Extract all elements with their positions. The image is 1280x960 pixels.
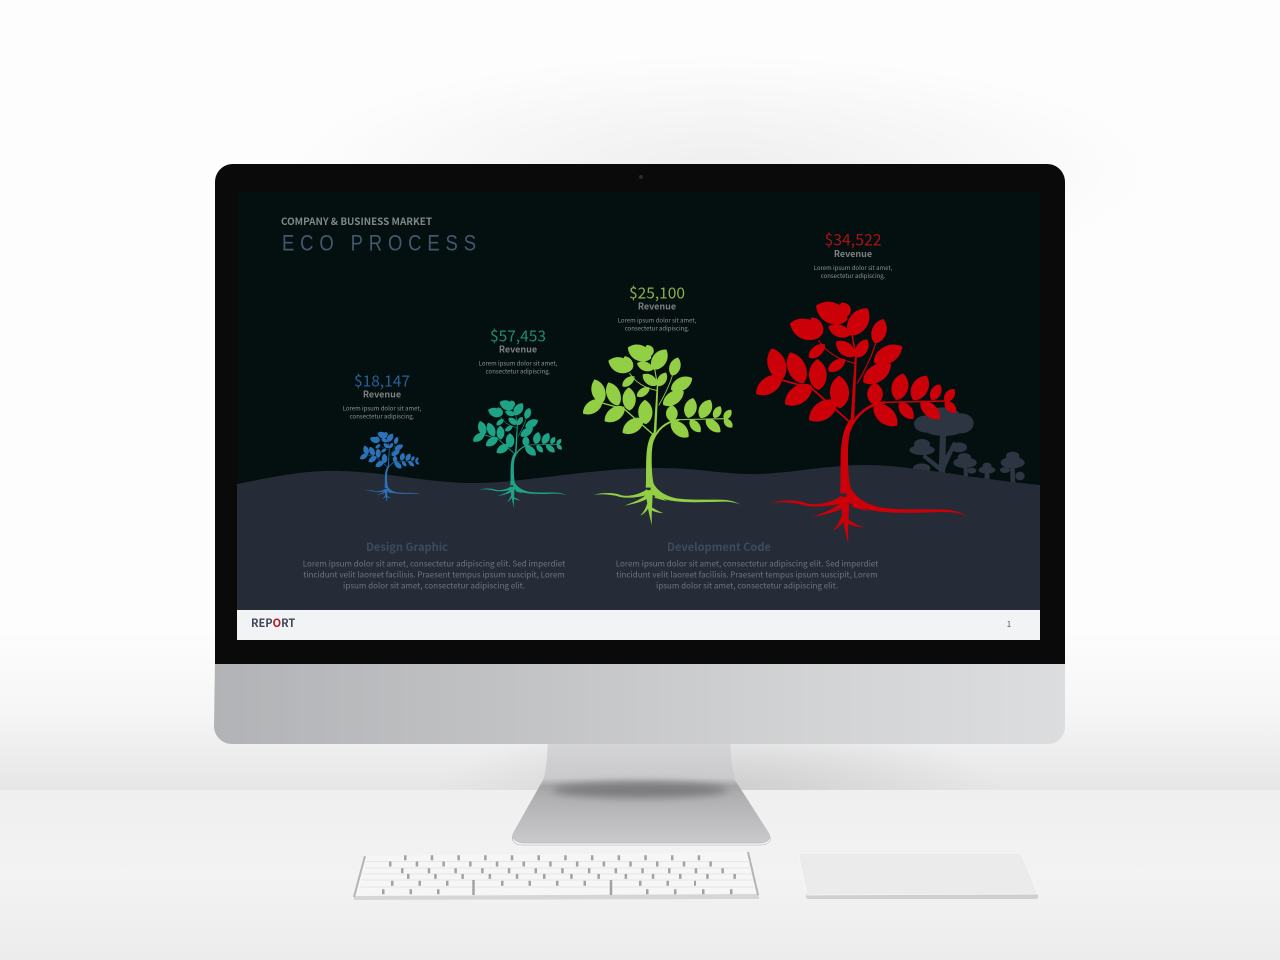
tree: blue — [359, 430, 422, 503]
stat: green revenue — [618, 282, 697, 332]
keyboard — [354, 852, 759, 900]
stat: teal revenue: consectetur adipiscing. — [486, 366, 551, 376]
text block: development code: tincidunt velit laoreet facilisis. Praesent tempus ipsum suscipit, Lorem — [616, 570, 878, 580]
footer bar — [237, 610, 1040, 640]
tree: teal — [471, 398, 567, 508]
stat: teal revenue: Lorem ipsum dolor sit amet, — [479, 358, 558, 368]
subtitle: COMPANY & BUSINESS MARKET — [281, 214, 432, 228]
text block: development code — [616, 539, 878, 592]
monitor bezel — [215, 164, 1065, 664]
background forest silhouette — [909, 407, 1025, 485]
camera — [639, 175, 643, 179]
text block: development code: ipsum dolor sit amet, consectetur adipiscing elit. — [656, 580, 838, 592]
trackpad — [798, 853, 1038, 899]
stat: green revenue: $25,100 — [629, 282, 685, 304]
stat: red revenue: consectetur adipiscing. — [821, 271, 886, 280]
screen: slide background — [237, 192, 1040, 640]
stat: blue revenue — [343, 370, 422, 420]
footer brand: REPORT — [251, 615, 295, 631]
monitor chin — [214, 660, 1065, 744]
stat: red revenue — [814, 228, 893, 280]
title: ECO PROCESS — [282, 232, 476, 256]
stat: red revenue: Lorem ipsum dolor sit amet, — [814, 263, 893, 272]
text block: design graphic — [303, 539, 565, 592]
text block: design graphic: tincidunt velit laoreet facilisis. Praesent tempus ipsum suscipit, Lorem — [303, 570, 565, 580]
ground hill — [237, 465, 1040, 610]
stat: green revenue: consectetur adipiscing. — [625, 324, 690, 332]
stat: red revenue: Revenue — [834, 247, 872, 260]
stat: teal revenue — [479, 324, 558, 376]
text block: development code: Lorem ipsum dolor sit amet, consectetur adipiscing elit. Sed imperdiet — [616, 558, 878, 570]
stat: blue revenue: Lorem ipsum dolor sit amet, — [343, 404, 422, 412]
stat: teal revenue: Revenue — [499, 342, 537, 356]
text block: design graphic: ipsum dolor sit amet, consectetur adipiscing elit. — [343, 580, 525, 592]
tree: red — [751, 296, 967, 544]
stat: green revenue: Lorem ipsum dolor sit amet, — [618, 316, 697, 324]
title block — [281, 214, 476, 256]
text block: design graphic: Design Graphic — [366, 539, 448, 555]
page number: 1 — [1007, 619, 1011, 630]
tree: green — [580, 340, 741, 526]
text block: design graphic: Lorem ipsum dolor sit amet, consectetur adipiscing elit. Sed imperdiet — [303, 558, 565, 570]
monitor stand — [512, 740, 770, 845]
text block: development code: Development Code — [667, 539, 771, 555]
stat: red revenue: $34,522 — [824, 228, 882, 250]
stat: blue revenue: $18,147 — [354, 370, 410, 392]
stat: green revenue: Revenue — [638, 300, 676, 312]
stat: blue revenue: consectetur adipiscing. — [350, 412, 415, 420]
stat: blue revenue: Revenue — [363, 388, 401, 400]
monitor body — [214, 164, 1065, 744]
stat: teal revenue: $57,453 — [490, 324, 546, 346]
